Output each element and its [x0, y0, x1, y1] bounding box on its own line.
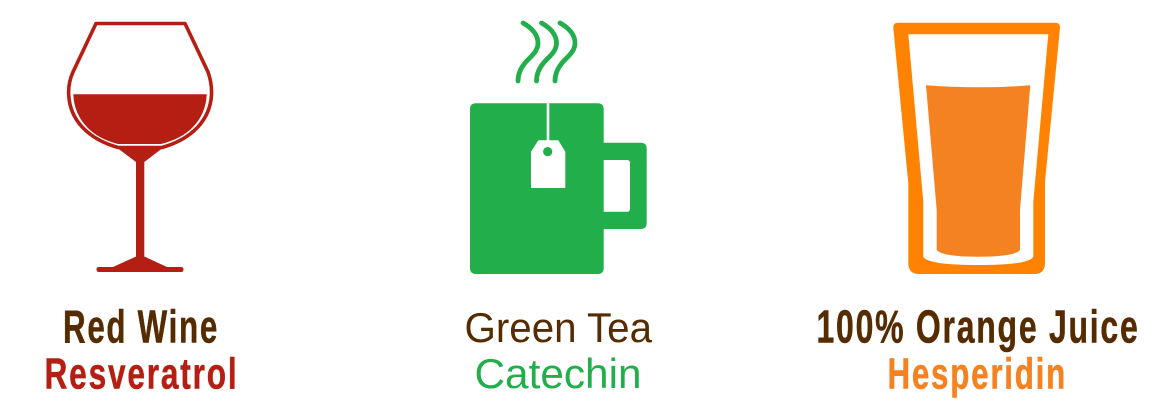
- icon: orange juice glass: [893, 23, 1060, 274]
- tea bag tag: [531, 103, 565, 188]
- mug steam: [518, 23, 575, 81]
- label: Resveratrol: Resveratrol: [44, 350, 238, 398]
- icon: red wine glass: [69, 24, 212, 272]
- mug body and handle: [470, 103, 647, 274]
- label: Green Tea: Green Tea: [464, 304, 653, 351]
- juice fill: [926, 85, 1030, 257]
- icon: green tea mug: [470, 23, 647, 274]
- label: Catechin: Catechin: [474, 350, 642, 397]
- label: Hesperidin: Hesperidin: [888, 350, 1067, 398]
- label: Red Wine: Red Wine: [63, 300, 219, 352]
